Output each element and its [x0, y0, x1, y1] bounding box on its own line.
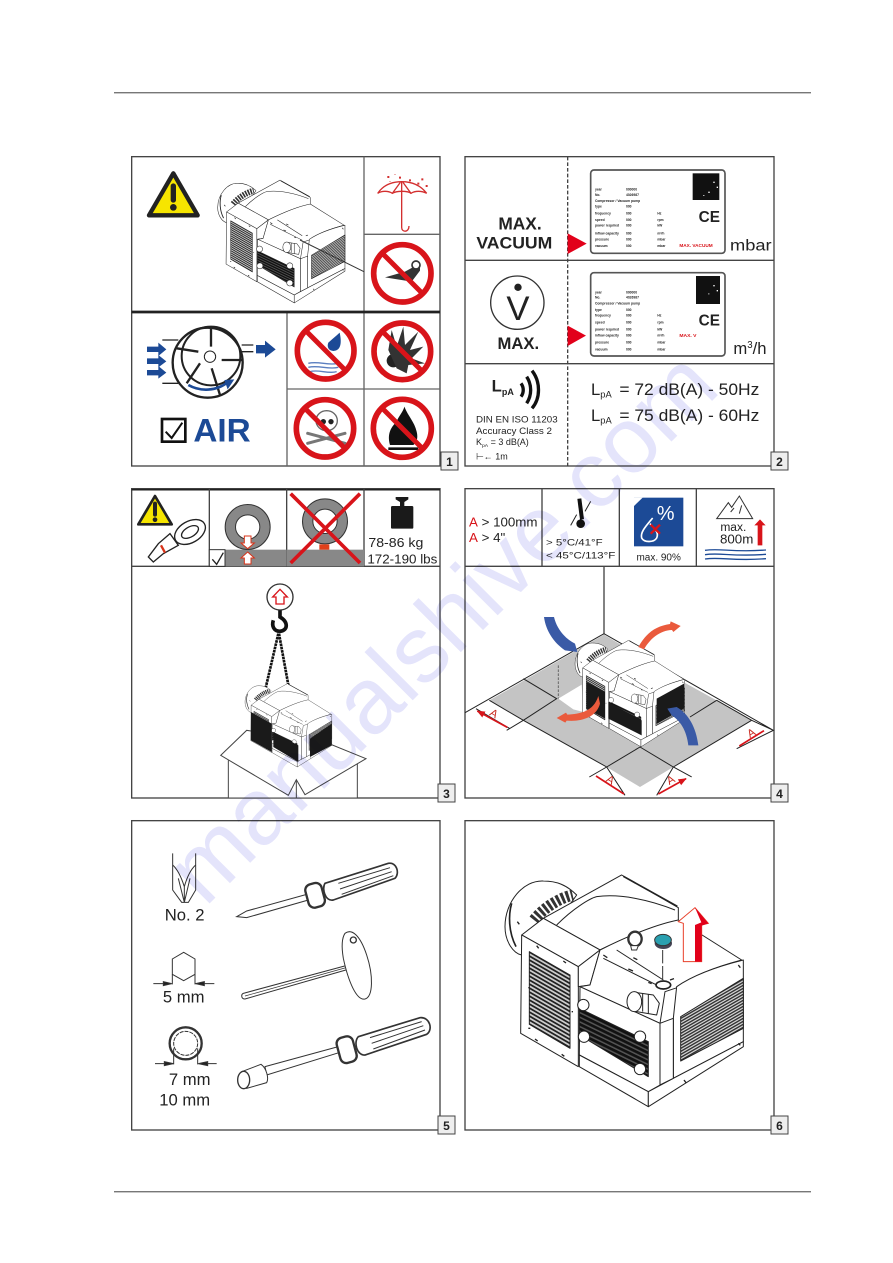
icon: weight — [367, 497, 437, 567]
icon: max flow V — [491, 276, 544, 353]
max vacuum heading: MAX. — [498, 213, 542, 233]
icon: altitude — [705, 496, 766, 560]
clearance dimensions A: A — [604, 773, 617, 788]
type plate: max vacuum: pressure — [595, 237, 609, 241]
type plate: max vacuum: year — [595, 188, 603, 192]
type plate: max flow: mbar — [657, 347, 666, 351]
icon: warning with eye bolt — [138, 496, 210, 562]
type plate: max vacuum: 000 — [626, 244, 632, 248]
icon: sound level: pA — [502, 387, 514, 397]
icon: warning triangle — [149, 173, 198, 215]
panel number 5 — [438, 1116, 455, 1134]
noise values: pA — [600, 390, 612, 400]
air flow arrows — [544, 617, 698, 745]
type plate: max vacuum: MAX. VACUUM — [679, 243, 713, 249]
type plate: max vacuum: Compressor / Vacuum pump — [595, 199, 640, 203]
unit mbar: mbar — [730, 238, 772, 255]
noise values: pA — [600, 416, 612, 426]
type plate: max vacuum: speed — [595, 218, 605, 222]
red lift arrow — [678, 908, 708, 962]
panel number 1 — [441, 452, 458, 470]
panel 4: installation conditions — [465, 489, 774, 798]
icon: temperature: > 5°C/41°F — [546, 537, 603, 547]
oil plug — [655, 934, 672, 989]
pump illustration — [218, 180, 364, 303]
type plate: max flow: 000 — [626, 347, 632, 351]
type plate: max flow: CE — [699, 312, 720, 329]
type plate: max flow: Compressor / Vacuum pump — [595, 301, 640, 305]
icon: socket size: 7 mm — [169, 1070, 210, 1089]
floor clearance grid — [465, 634, 773, 795]
panel number 2: 2 — [776, 455, 783, 469]
type plate: max vacuum: 000 — [626, 218, 632, 222]
type plate: max flow: 000000 — [626, 290, 637, 294]
noise standard text — [476, 414, 558, 461]
icon: pump vane diagram — [147, 327, 276, 398]
type plate: max vacuum: inflow capacity — [595, 231, 619, 235]
icon: max flow V: MAX. — [498, 334, 539, 353]
type plate: max vacuum: vacuum — [595, 244, 608, 248]
red pointer — [568, 326, 586, 346]
noise standard text: DIN EN ISO 11203 — [476, 414, 558, 424]
type plate: max vacuum: m³/h — [657, 231, 664, 235]
icon: correct eye bolt — [209, 510, 287, 566]
panel number 4: 4 — [776, 787, 783, 801]
type plate: max vacuum: 000 — [626, 205, 632, 209]
type plate: max vacuum: kW — [657, 224, 663, 228]
panel 2: type plates and noise — [465, 157, 774, 466]
icon: humidity: max. 90% — [636, 552, 681, 563]
icon: no oil can — [374, 245, 431, 302]
type plate: max flow: pressure — [595, 341, 609, 345]
air only label — [162, 413, 251, 449]
panel 5: tools — [132, 821, 440, 1130]
clearance dimensions A — [477, 707, 764, 794]
type plate: max flow: 000 — [626, 314, 632, 318]
type plate: max flow: MAX. V — [679, 333, 697, 339]
icon: humidity: % — [657, 503, 675, 525]
panel number 4 — [771, 784, 788, 802]
type plate: max flow: 000 — [626, 320, 632, 324]
socket driver — [238, 1018, 430, 1089]
watermark: manualshive.com — [145, 331, 736, 922]
panel number 3 — [438, 784, 455, 802]
clearance dimensions A: A — [487, 707, 500, 721]
icon: socket size: 10 mm — [159, 1090, 210, 1109]
max vacuum heading: VACUUM — [476, 233, 552, 252]
icon: no water — [297, 322, 354, 379]
type plate: max flow: mbar — [657, 341, 666, 345]
type plate: max flow: 000 — [626, 308, 632, 312]
red pointer — [568, 233, 587, 254]
footer rule — [114, 1191, 811, 1192]
panel number 1: 1 — [446, 455, 453, 469]
type plate: max flow: frequency — [595, 314, 611, 318]
icon: phillips tip: No. 2 — [165, 906, 205, 925]
type plate: max vacuum: power required — [595, 224, 619, 228]
type plate: max vacuum: 000 — [626, 224, 632, 228]
max vacuum heading — [476, 213, 552, 252]
clearance text — [469, 514, 538, 545]
unit m3/h: 3 — [747, 340, 753, 351]
screwdriver — [237, 863, 397, 918]
type plate: max vacuum: mbar — [657, 237, 666, 241]
icon: altitude: 800m — [720, 532, 753, 547]
pump illustration — [245, 684, 332, 767]
icon: keep dry umbrella — [378, 174, 427, 231]
t-handle hex key — [242, 932, 371, 999]
type plate: max flow: inflow capacity — [595, 334, 619, 338]
icon: humidity — [634, 498, 683, 563]
noise standard text: = 3 dB(A) — [488, 437, 529, 447]
type plate: max vacuum: Hz — [657, 211, 662, 215]
icon: sound level — [492, 371, 538, 408]
type plate: max flow: power required — [595, 327, 619, 331]
panel 1: warnings — [132, 157, 440, 466]
icon: no explosive — [374, 323, 431, 380]
type plate: max vacuum: 000 — [626, 237, 632, 241]
icon: phillips tip — [165, 853, 205, 925]
cardboard box — [221, 730, 366, 798]
type plate: max vacuum: CE — [699, 209, 720, 226]
panel number 3: 3 — [443, 787, 450, 801]
panel number 6: 6 — [776, 1119, 783, 1133]
pump illustration — [505, 875, 743, 1107]
type plate: max flow: year — [595, 290, 603, 294]
type plate: max flow: 000 — [626, 341, 632, 345]
noise standard text: Accuracy Class 2 — [476, 426, 552, 436]
type plate: max vacuum: mbar — [657, 244, 666, 248]
type plate: max flow: speed — [595, 320, 605, 324]
clearance dimensions A: A — [745, 726, 758, 741]
panel 6: oil plug removal — [465, 821, 774, 1130]
unit m3/h: m — [733, 339, 747, 358]
type plate: max flow: 4026987 — [626, 295, 639, 299]
type plate: max flow: Hz — [657, 314, 662, 318]
noise values: L — [591, 406, 600, 425]
noise values: = 75 dB(A) - 60Hz — [619, 406, 759, 425]
icon: temperature: < 45°C/113°F — [546, 551, 616, 561]
icon: weight: 172-190 lbs — [367, 553, 437, 567]
hook and chains — [264, 610, 292, 707]
icon: incorrect eye bolt — [287, 494, 364, 566]
noise standard text: K — [476, 437, 482, 447]
type plate: max flow: rpm — [657, 320, 664, 324]
panel number 6 — [771, 1116, 788, 1134]
type plate: max vacuum: 4026987 — [626, 193, 639, 197]
icon: weight: 78-86 kg — [368, 535, 423, 550]
type plate: max flow: vacuum — [595, 347, 608, 351]
type plate: max vacuum: No. — [595, 193, 600, 197]
type plate: max flow: 000 — [626, 327, 632, 331]
noise values: L — [591, 380, 600, 399]
type plate: max flow: kW — [657, 327, 663, 331]
icon: socket size — [155, 1027, 217, 1109]
icon: sound level: L — [492, 377, 502, 396]
noise values: = 72 dB(A) - 50Hz — [619, 380, 759, 399]
type plate: max vacuum: 000 — [626, 231, 632, 235]
noise values — [591, 380, 759, 426]
type plate: max flow: m³/h — [657, 334, 664, 338]
icon: no fire — [373, 399, 431, 457]
eye bolt — [628, 932, 642, 950]
unit m3/h — [733, 339, 766, 358]
type plate: max flow: No. — [595, 295, 600, 299]
noise standard text: ⊢← 1m — [476, 451, 508, 461]
icon: max flow V: V — [506, 290, 530, 328]
clearance text: A > 100mm — [469, 514, 538, 529]
type plate: max vacuum: frequency — [595, 211, 611, 215]
type plate: max vacuum: 000000 — [626, 188, 637, 192]
icon: temperature — [546, 499, 616, 561]
panel number 2 — [771, 452, 788, 470]
type plate: max flow: 000 — [626, 334, 632, 338]
icon: lift arrow — [267, 584, 293, 610]
type plate: max flow: type — [595, 308, 602, 312]
type plate: max vacuum: 000 — [626, 211, 632, 215]
icon: altitude: max. — [720, 520, 746, 534]
pump illustration — [575, 640, 685, 747]
clearance text: A > 4" — [469, 530, 505, 545]
air only label: AIR — [193, 413, 251, 449]
type plate: max vacuum: rpm — [657, 218, 664, 222]
icon: hex key size — [153, 952, 214, 1007]
icon: hex key size: 5 mm — [163, 988, 204, 1007]
type plate: max flow — [591, 273, 725, 356]
header rule — [114, 92, 811, 93]
clearance dimensions A: A — [665, 773, 678, 788]
unit m3/h: /h — [753, 339, 766, 358]
type plate: max vacuum — [591, 170, 725, 253]
type plate: max vacuum: type — [595, 205, 602, 209]
panel 3: lifting — [132, 489, 440, 798]
icon: no toxic — [296, 400, 354, 457]
noise standard text: pA — [482, 443, 489, 449]
panel number 5: 5 — [443, 1119, 450, 1133]
